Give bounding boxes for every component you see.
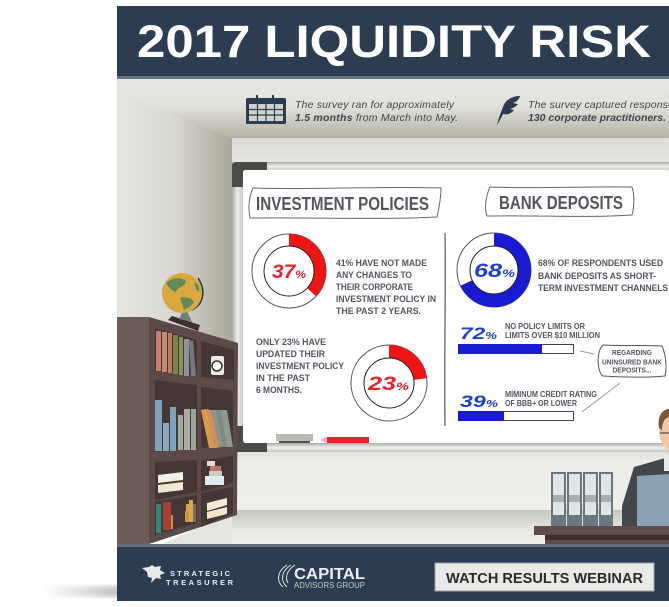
text: 41% no changes [336,258,436,317]
footer banner [117,544,669,601]
logo: strategic treasurer: STRATEGIC [170,569,231,578]
logo: capital advisors group [278,565,365,590]
whiteboard [232,162,669,452]
survey duration text: 1.5 months from March into May. [295,112,458,124]
button: watch results webinar: WATCH RESULTS WEBINAR [446,571,644,587]
clock [211,356,224,375]
donut chart: 37% [252,234,326,308]
bar: 39%: OF BBB+ OR LOWER [505,399,577,408]
bar: 39%: 39 % [460,392,498,411]
text: 68% of respondents: BANK DEPOSITS AS SHORT- [538,271,656,282]
bar: 72%: LIMITS OVER $10 MILLION [505,331,600,340]
text: only 23% updated [256,337,345,396]
bar: 39%: MIMINUM CREDIT RATING [505,390,597,399]
text: only 23% updated: IN THE PAST [256,373,310,384]
marker [320,437,369,443]
text: 41% no changes: INVESTMENT POLICY IN [336,294,436,305]
callout: uninsured bank deposits: UNINSURED BANK [602,358,663,366]
text: 41% no changes: THE PAST 2 YEARS. [336,306,421,317]
bookcase [117,317,238,545]
bar: 72%: NO POLICY LIMITS OR [505,322,585,331]
text: only 23% updated: ONLY 23% HAVE [256,337,326,348]
logo: capital advisors group: CAPITAL [294,566,365,583]
divider [444,233,446,426]
heading: bank deposits [486,187,634,216]
icon: globe [162,273,203,331]
title: 2017 LIQUIDITY RISK [137,16,652,67]
books: top shelf [156,331,196,376]
bar: 72%: 72 % [460,324,497,343]
header banner [117,6,669,79]
survey duration text: The survey ran for approximately [295,99,455,111]
heading: investment policies [249,187,441,218]
text: only 23% updated: 6 MONTHS. [256,385,302,396]
bar: 39% [458,390,597,421]
survey respondents text: 130 corporate practitioners. [528,112,666,124]
donut chart: 37%: 37% [272,262,306,283]
logo: capital advisors group: ADVISORS GROUP [294,581,365,590]
drop shadow [44,586,124,597]
laptop [637,474,669,526]
binders [551,472,613,526]
text: 41% no changes: ANY CHANGES TO [336,270,412,281]
desk [534,526,669,544]
donut chart: 68%: 68 % [474,261,515,282]
logo: strategic treasurer [142,565,234,587]
logo: strategic treasurer: TREASURER [166,578,234,587]
text: only 23% updated: UPDATED THEIR [256,349,325,360]
survey respondents text [528,99,669,124]
text: only 23% updated: INVESTMENT POLICY [256,361,345,372]
heading: bank deposits: BANK DEPOSITS [499,192,623,213]
donut chart: 68% [457,233,531,307]
icon: feather [497,96,520,125]
room background [117,79,669,545]
person [622,409,669,526]
icon: calendar [246,95,286,124]
bar: 72% [458,322,600,354]
callout: uninsured bank deposits [580,345,666,412]
survey duration text [295,99,458,124]
button: watch results webinar [435,563,654,591]
donut chart: 23% [351,345,427,421]
text: 41% no changes: 41% HAVE NOT MADE [336,258,427,269]
callout: uninsured bank deposits: REGARDING [612,348,652,357]
books: lower shelves [156,461,227,533]
heading: investment policies: INVESTMENT POLICIES [256,193,429,214]
books: middle shelf [155,400,233,451]
text: 68% of respondents [538,258,668,294]
eraser [276,434,313,443]
donut chart: 23%: 23 % [367,374,409,395]
text: 41% no changes: THEIR CORPORATE [336,282,413,293]
callout: uninsured bank deposits: DEPOSITS... [612,366,652,374]
